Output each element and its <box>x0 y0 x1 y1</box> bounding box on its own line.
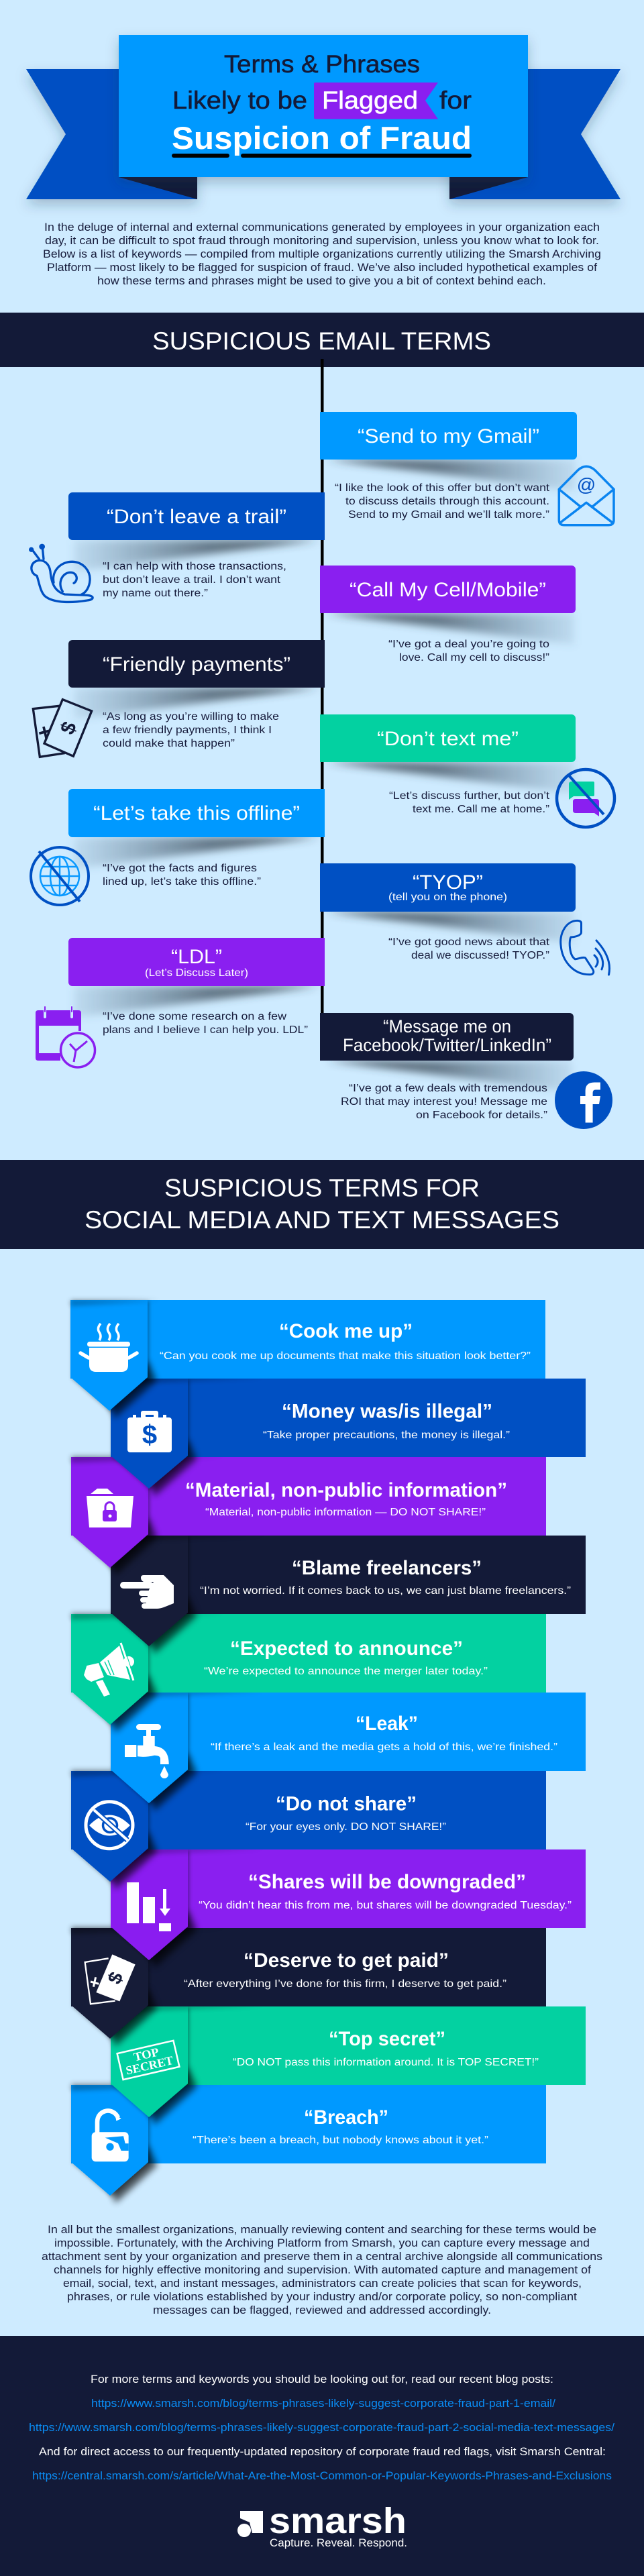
section header: social media and text messages <box>0 1160 644 1249</box>
link part 1: https://www.smarsh.com/blog/terms-phrases-likely-suggest-corporate-fraud-part-1-email/ <box>91 2397 555 2410</box>
term: let's take this offline <box>31 789 325 905</box>
for word: for <box>439 87 472 114</box>
icon: phone <box>561 920 610 975</box>
term: don't text me <box>320 714 614 827</box>
term: LDL: (Let’s Discuss Later) <box>145 967 248 979</box>
icon: money <box>33 700 92 757</box>
flag shape behind Flagged <box>314 83 438 119</box>
term: LDL: “LDL” <box>171 946 222 968</box>
intro paragraph: day, it can be difficult to spot fraud through monitoring and supervision, unless you know what to look for. <box>45 234 599 247</box>
row: material, non-public information: “Material, non-public information — DO NOT SHARE!” <box>205 1507 486 1518</box>
row: do not share: “Do not share” <box>276 1792 417 1815</box>
icon: snail <box>29 544 93 602</box>
blog posts text: For more terms and keywords you should be looking out for, read our recent blog posts: <box>91 2373 553 2385</box>
icon: crossed eye <box>86 1802 133 1849</box>
icon: money <box>85 1954 136 2004</box>
icon: pointing hand <box>120 1575 174 1609</box>
icon: envelope <box>559 466 614 525</box>
quote <box>389 790 550 815</box>
quote: “I’ve got good news about that <box>388 936 550 948</box>
closing paragraph: messages can be flagged, reviewed and addressed accordingly. <box>153 2304 491 2316</box>
term: call my cell/mobile <box>320 566 576 663</box>
icon: steaming pot <box>80 1324 137 1372</box>
closing paragraph: email, social, text, and instant messages, administrators can create policies that scan for keywords, <box>63 2277 582 2290</box>
smarsh logo <box>237 2501 407 2549</box>
quote: “I’ve done some research on a few <box>103 1011 287 1022</box>
heading line two: Likely to be <box>172 87 307 114</box>
intro paragraph <box>43 221 601 287</box>
term: don't leave a trail: “Don’t leave a trail” <box>107 506 286 528</box>
quote: on Facebook for details.” <box>416 1110 547 1121</box>
row: money was/is illegal: “Take proper precautions, the money is illegal.” <box>263 1430 510 1441</box>
icon: falling bars <box>127 1882 171 1931</box>
ribbon main panel <box>119 35 528 177</box>
row: breach <box>71 2084 546 2203</box>
icon: top secret stamp: SECRET <box>124 2053 174 2078</box>
section header: social media and text messages: SOCIAL MEDIA AND TEXT MESSAGES <box>85 1206 559 1234</box>
term: message me on facebook/twitter/linkedin: Facebook/Twitter/LinkedIn” <box>343 1035 551 1055</box>
icon: money briefcase <box>127 1411 172 1452</box>
term: TYOP <box>320 863 610 975</box>
quote <box>388 936 550 961</box>
term: friendly payments: “Friendly payments” <box>103 653 290 676</box>
quote: my name out there.” <box>103 588 208 599</box>
row: material, non-public information <box>71 1456 546 1575</box>
closing paragraph: channels for highly effective monitoring and supervision. With automated capture and management of <box>54 2263 591 2276</box>
term: TYOP: “TYOP” <box>413 871 483 894</box>
smarsh logo: smarsh <box>269 2501 407 2541</box>
row: deserve to get paid: “After everything I’ve done for this firm, I deserve to get paid.” <box>184 1978 506 1990</box>
intro paragraph: Below is a list of keywords — compiled from multiple organizations currently utilizing the Smarsh Archiving <box>43 248 601 260</box>
row: top secret <box>111 2005 586 2125</box>
icon: megaphone <box>84 1643 134 1697</box>
ribbon tail right <box>449 69 621 199</box>
heading line one: Terms & Phrases <box>224 50 420 78</box>
quote <box>341 1083 547 1121</box>
icon: top secret stamp: TOP <box>132 2045 160 2063</box>
icon: money: $ <box>56 718 81 738</box>
row: shares will be downgraded <box>111 1848 586 1968</box>
ribbon fold right <box>449 177 528 199</box>
term: message me on facebook/twitter/linkedin: “Message me on <box>383 1016 511 1036</box>
quote: “As long as you’re willing to make <box>103 711 279 722</box>
icon: faucet <box>125 1724 169 1778</box>
intro paragraph: how these terms and phrases might be used to give you a bit of context behind each. <box>97 274 546 287</box>
row: do not share: “For your eyes only. DO NOT SHARE!” <box>246 1821 446 1833</box>
row: do not share <box>71 1770 546 1889</box>
row: cook me up <box>70 1300 545 1418</box>
icon: no globe <box>31 847 89 905</box>
row: top secret: “Top secret” <box>329 2028 445 2050</box>
row: money was/is illegal <box>111 1377 586 1496</box>
term: call my cell/mobile: “Call My Cell/Mobile” <box>350 579 546 601</box>
quote: a few friendly payments, I think I <box>103 724 272 736</box>
icon: money briefcase: $ <box>142 1420 157 1450</box>
ribbon fold left <box>119 177 197 199</box>
title banner <box>26 35 621 199</box>
term: send to my gmail: “Send to my Gmail” <box>358 425 539 447</box>
row: expected to announce: “Expected to announce” <box>230 1638 463 1660</box>
closing paragraph: In all but the smallest organizations, manually reviewing content and searching for these terms would be <box>48 2223 596 2236</box>
quote: plans and I believe I can help you. LDL” <box>103 1024 308 1036</box>
section header: suspicious email terms <box>0 313 644 367</box>
quote: love. Call my cell to discuss!” <box>399 652 549 663</box>
quote: to discuss details through this account. <box>345 496 549 507</box>
row: top secret: “DO NOT pass this information around. It is TOP SECRET!” <box>233 2057 539 2068</box>
row: cook me up: “Can you cook me up documents that make this situation look better?” <box>160 1350 531 1362</box>
closing paragraph: attachment sent by your organization and preserve them in a central archive alongside all communications <box>42 2250 602 2263</box>
term: LDL <box>36 938 325 1067</box>
intro paragraph: Platform — most likely to be flagged for suspicion of fraud. We’ve also included hypothetical examples of <box>47 261 597 274</box>
flagged word: Flagged <box>322 87 418 114</box>
row: material, non-public information: “Material, non-public information” <box>185 1479 507 1501</box>
heading line three: Suspicion of Fraud <box>172 120 472 156</box>
row: blame freelancers: “Blame freelancers” <box>292 1557 482 1579</box>
quote <box>103 561 286 599</box>
quote: “I’ve got the facts and figures <box>103 863 257 874</box>
quote <box>103 863 261 888</box>
link part 2: https://www.smarsh.com/blog/terms-phrases-likely-suggest-corporate-fraud-part-2-social-media-text-messages/ <box>29 2421 614 2434</box>
smarsh logo: Capture. Reveal. Respond. <box>270 2536 407 2549</box>
term: TYOP: (tell you on the phone) <box>388 892 507 903</box>
icon: top secret stamp <box>117 2041 179 2080</box>
row: breach: “Breach” <box>304 2106 388 2129</box>
quote <box>103 711 279 749</box>
closing paragraph <box>42 2223 602 2316</box>
intro paragraph: In the deluge of internal and external communications generated by employees in your organization each <box>44 221 600 233</box>
row: deserve to get paid <box>71 1927 546 2046</box>
term: don't text me: “Don’t text me” <box>377 728 519 750</box>
term: send to my gmail <box>320 412 614 525</box>
term: message me on facebook/twitter/linkedin <box>320 1013 612 1129</box>
quote: “I’ve got a deal you’re going to <box>388 639 549 650</box>
row: blame freelancers <box>111 1534 586 1654</box>
smarsh central text: And for direct access to our frequently-updated repository of corporate fraud red flags, visit Smarsh Central: <box>39 2445 606 2458</box>
quote <box>388 639 549 663</box>
footer panel <box>0 2336 644 2576</box>
closing paragraph: phrases, or rule violations established by your industry and/or corporate policy, so non-compliant <box>67 2290 577 2303</box>
quote: deal we discussed! TYOP.” <box>411 950 549 961</box>
timeline vertical line <box>321 359 323 1013</box>
link smarsh central: https://central.smarsh.com/s/article/What-Are-the-Most-Common-or-Popular-Keywords-Phrases-and-Exclusions <box>32 2469 612 2482</box>
row: leak: “If there’s a leak and the media gets a hold of this, we’re finished.” <box>211 1741 557 1753</box>
row: money was/is illegal: “Money was/is illegal” <box>282 1401 492 1422</box>
quote: lined up, let’s take this offline.” <box>103 876 261 888</box>
ribbon tail left <box>26 69 197 199</box>
row: deserve to get paid: “Deserve to get paid” <box>244 1949 449 1972</box>
underline <box>172 154 472 158</box>
row: leak: “Leak” <box>356 1713 418 1735</box>
row: shares will be downgraded: “You didn’t hear this from me, but shares will be downgraded Tuesday.” <box>199 1900 572 1911</box>
row: blame freelancers: “I’m not worried. If it comes back to us, we can just blame freelancers.” <box>200 1585 571 1597</box>
icon: no text messages <box>557 769 614 827</box>
term: friendly payments <box>33 640 325 757</box>
icon: envelope: @ <box>577 474 596 495</box>
term: let's take this offline: “Let’s take this offline” <box>93 802 300 824</box>
section header: social media and text messages: SUSPICIOUS TERMS FOR <box>164 1174 480 1202</box>
quote: “I’ve got a few deals with tremendous <box>349 1083 547 1094</box>
quote: ROI that may interest you! Message me <box>341 1096 547 1108</box>
row: cook me up: “Cook me up” <box>279 1320 413 1342</box>
row: breach: “There’s been a breach, but nobody knows about it yet.” <box>193 2135 488 2146</box>
term: don't leave a trail <box>29 492 325 602</box>
quote <box>335 482 550 521</box>
quote: Send to my Gmail and we’ll talk more.” <box>348 509 549 521</box>
icon: facebook <box>555 1071 612 1129</box>
quote <box>103 1011 308 1036</box>
quote: “I can help with those transactions, <box>103 561 286 572</box>
quote: could make that happen” <box>103 738 235 749</box>
quote: but don’t leave a trail. I don’t want <box>103 574 281 586</box>
row: expected to announce: “We’re expected to announce the merger later today.” <box>204 1666 488 1677</box>
icon: calendar with clock <box>36 1006 95 1067</box>
icon: locked folder <box>87 1489 133 1527</box>
closing paragraph: impossible. Fortunately, with the Archiving Platform from Smarsh, you can capture every message and <box>54 2237 590 2249</box>
row: shares will be downgraded: “Shares will be downgraded” <box>248 1871 526 1893</box>
section header: suspicious email terms: SUSPICIOUS EMAIL TERMS <box>152 327 491 355</box>
row: expected to announce <box>71 1613 546 1732</box>
icon: broken lock <box>92 2110 129 2161</box>
quote: “Let’s discuss further, but don’t <box>389 790 550 802</box>
quote: “I like the look of this offer but don’t want <box>335 482 550 494</box>
row: leak <box>111 1691 586 1811</box>
quote: text me. Call me at home.” <box>413 804 549 815</box>
icon: money: $ <box>104 1969 127 1987</box>
